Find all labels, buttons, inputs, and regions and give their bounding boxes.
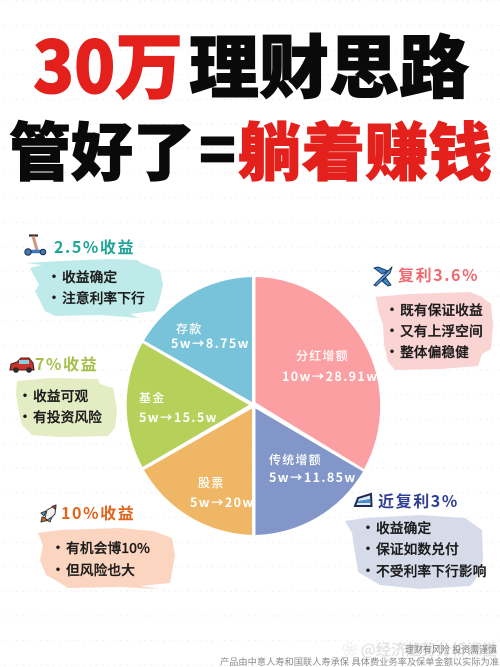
bullet list: · [385, 342, 399, 362]
icon: scooter [25, 236, 46, 255]
bullet list: · [47, 288, 61, 308]
bullet list: 收益确定 [376, 517, 431, 537]
slice: deposits [144, 277, 252, 402]
bullet list [51, 537, 150, 580]
brush background [376, 292, 493, 370]
label: funds: 5w→15.5w [139, 407, 218, 426]
title line 1: 30万 [33, 9, 183, 114]
bullet list: · [51, 538, 65, 558]
bullet list: 有投资风险 [33, 406, 102, 426]
title line 2 [9, 101, 492, 194]
label: deposits [171, 320, 250, 352]
icon: airplane [374, 267, 392, 286]
brush background [26, 259, 163, 318]
label: funds: 基金 [139, 389, 165, 406]
bullet list: 收益可观 [33, 385, 88, 405]
bullet list: 但风险也大 [66, 559, 135, 579]
label: dividend annuity: 10w→28.91w [282, 366, 378, 385]
slice: stocks [144, 408, 252, 535]
footer disclaimer: 产品由中意人寿和国联人寿承保 具体费业务率及保单金额以实际为准 [220, 656, 499, 667]
title line 1 [33, 9, 469, 114]
bullet list: 不受利率下行影响 [376, 560, 486, 580]
bullet list: · [47, 267, 61, 287]
bullet list: · [18, 407, 32, 427]
brush background [38, 528, 175, 589]
slice: traditional annuity [256, 408, 363, 535]
label: dividend annuity: 分红增额 [296, 347, 349, 364]
label: traditional annuity [269, 451, 357, 486]
bullet list: · [361, 561, 375, 581]
pie chart [127, 277, 380, 535]
bullet list: 有机会博10% [66, 537, 150, 557]
label: stocks: 5w→20w [190, 492, 255, 511]
bullet list [361, 517, 486, 581]
label: deposits: 5w→8.75w [171, 333, 250, 352]
bullet list: 注意利率下行 [62, 287, 145, 307]
bullet list: 又有上浮空间 [400, 320, 483, 340]
title line 2: 管好了 [9, 103, 195, 194]
bullet list: · [361, 539, 375, 559]
icon: rocket [41, 505, 56, 522]
panel: 7% yield [10, 351, 117, 437]
bullet list: 收益确定 [62, 266, 117, 286]
heading: 10%收益 [61, 500, 135, 524]
label: stocks: 股票 [198, 474, 224, 491]
bullet list [18, 385, 102, 427]
heading: 7%收益 [35, 351, 98, 375]
bullet list [47, 266, 145, 308]
brush background [16, 378, 117, 437]
heading: 2.5%收益 [54, 234, 135, 258]
bullet list: · [361, 518, 375, 538]
label: deposits: 存款 [176, 320, 202, 337]
label: traditional annuity: 传统增额 [269, 451, 322, 468]
title line 1: 理财思路 [189, 12, 469, 112]
panel: compound 3.6% [374, 262, 493, 370]
bullet list: 既有保证收益 [400, 299, 483, 319]
bullet list: 整体偏稳健 [400, 341, 469, 361]
risk notice: 理财有风险 投资需谨慎 [405, 644, 497, 656]
icon: train [355, 494, 372, 506]
heading: 近复利3% [378, 488, 459, 512]
title line 2: = [199, 101, 236, 192]
panel: 2.5% yield [25, 234, 163, 318]
bullet list: · [385, 300, 399, 320]
watermark: ❀ @经济趋势分析课堂 [342, 638, 497, 660]
brush background [345, 515, 483, 589]
title line 2: 躺着赚钱 [238, 103, 492, 194]
bullet list: · [385, 321, 399, 341]
panel: near compound 3% [345, 488, 486, 589]
icon: car [10, 358, 34, 373]
label: funds [139, 389, 218, 426]
label: traditional annuity: 5w→11.85w [269, 467, 357, 486]
label: dividend annuity [282, 347, 378, 385]
bullet list [385, 299, 483, 362]
bullet list: · [51, 560, 65, 580]
slice: funds [127, 343, 249, 467]
heading: 复利3.6% [398, 262, 479, 286]
bullet list: 保证如数兑付 [376, 538, 459, 558]
slice: dividend annuity [256, 277, 380, 469]
bullet list: · [18, 386, 32, 406]
label: stocks [190, 474, 255, 511]
panel: 10% yield [38, 500, 175, 589]
